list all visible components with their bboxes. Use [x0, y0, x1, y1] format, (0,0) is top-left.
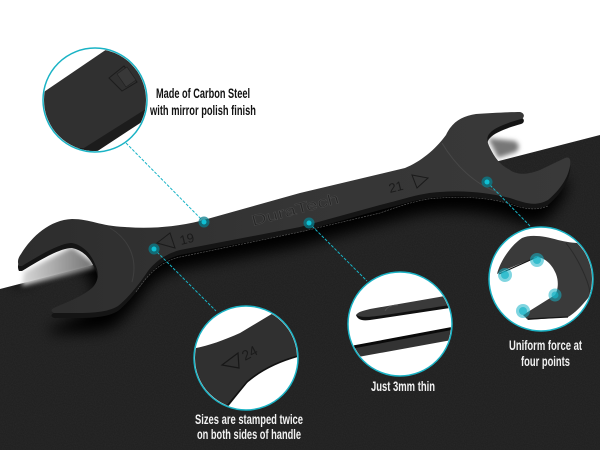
text: carbon steel: with mirror polish finish: [149, 102, 256, 118]
stamp: DuraTech: DuraTech: [250, 190, 341, 230]
callout: thickness closeup: [345, 272, 452, 376]
wrench body: [18, 112, 570, 313]
wrench cast shadow: [15, 132, 567, 333]
callout: stamped size closeup: [193, 305, 299, 411]
lower stitch highlight: [136, 197, 548, 292]
callout: carbon steel closeup: [42, 47, 148, 153]
connector lines: [126, 143, 531, 311]
stamp: triangle 19: [157, 233, 175, 248]
stamp: triangle 21: [412, 175, 428, 188]
text: stamped sizes: [195, 411, 303, 442]
text: carbon steel: Made of Carbon Steel: [156, 85, 250, 101]
text: carbon steel: [149, 85, 256, 118]
text: four points: [509, 337, 582, 369]
text: stamped sizes: on both sides of handle: [197, 426, 301, 442]
head bevel lines: [110, 228, 134, 282]
callout: four points closeup: [489, 227, 600, 331]
stamp: 19: 19: [178, 230, 196, 248]
callout: stamped size closeup: 24: [239, 342, 260, 364]
wrench: [18, 112, 570, 318]
text: stamped sizes: Sizes are stamped twice: [195, 411, 303, 427]
text: four points: four points: [521, 353, 570, 369]
stamp: 21: 21: [387, 178, 405, 196]
marker dots: [148, 176, 492, 254]
dark background panel: [0, 135, 600, 450]
text: thickness: Just 3mm thin: [371, 378, 435, 394]
wrench lower edge: [18, 117, 570, 318]
force point markers: [498, 253, 562, 318]
